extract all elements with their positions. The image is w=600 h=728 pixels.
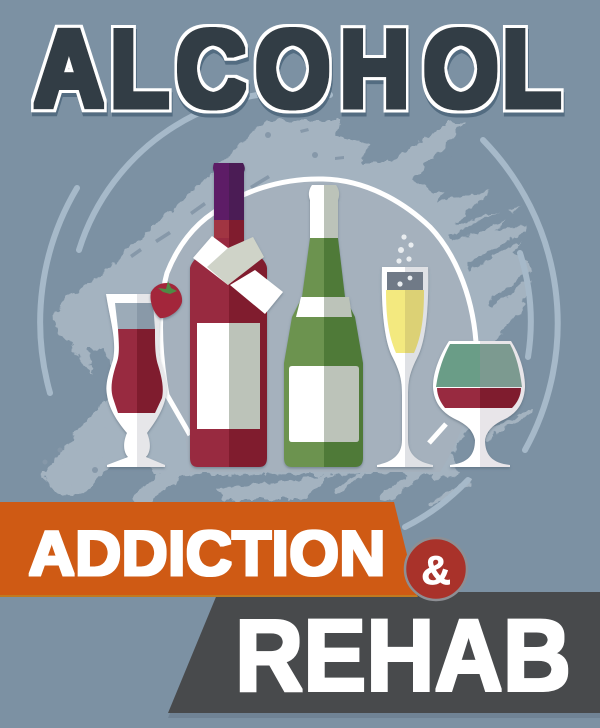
champagne neck band: [296, 297, 352, 317]
brush splash: [42, 120, 532, 495]
champagne label: [289, 366, 359, 442]
wine bottle: [190, 163, 283, 467]
text: addiction: ADDICTION: [28, 519, 386, 589]
wine bottle ribbon: [193, 236, 283, 314]
bubbles: [396, 234, 414, 287]
dark gaps between strokes: [336, 120, 532, 308]
inner white circle: [161, 179, 476, 472]
ampersand badge: [405, 538, 467, 600]
outer ring arcs: [40, 92, 558, 527]
title: ALCOHOL: [34, 7, 561, 130]
champagne flute: [377, 267, 433, 467]
champagne bottle: [284, 185, 363, 467]
brandy snifter: [433, 341, 525, 467]
wine bottle cap: [213, 163, 245, 220]
ampersand badge: &: [421, 547, 451, 593]
band: addiction: [0, 502, 418, 597]
glass: hurricane with red drink: [106, 294, 167, 467]
strawberry: [150, 281, 182, 318]
splash flecks: [42, 128, 344, 473]
champagne foil: [309, 185, 339, 238]
bottom brush patches: [58, 411, 530, 503]
wine bottle label: [197, 323, 260, 429]
text: rehab: REHAB: [235, 598, 571, 712]
band: rehab: [168, 592, 600, 718]
